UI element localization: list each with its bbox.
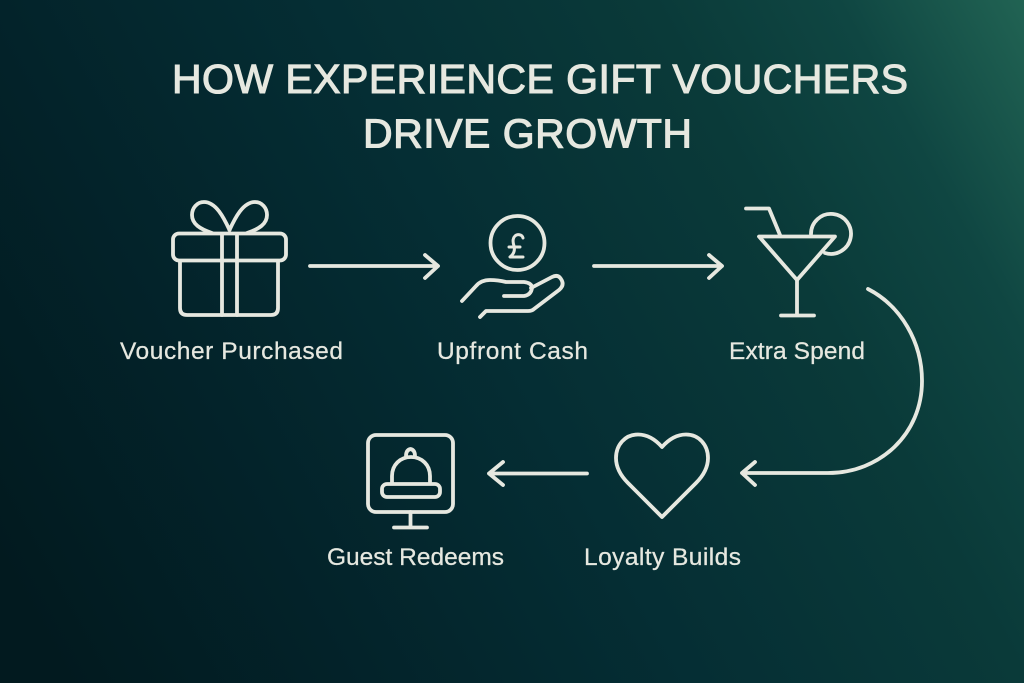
icon: gift box xyxy=(173,202,286,315)
label: Guest Redeems: Guest Redeems xyxy=(327,544,504,571)
icon: service bell on screen xyxy=(368,435,453,528)
arrow: cash to spend xyxy=(594,255,722,278)
title: DRIVE GROWTH xyxy=(363,110,692,156)
label: Upfront Cash: Upfront Cash xyxy=(437,338,588,365)
arrow: loyalty to guest xyxy=(489,462,587,485)
pound sign xyxy=(509,235,523,257)
arrow: purchased to cash xyxy=(310,255,438,278)
title: HOW EXPERIENCE GIFT VOUCHERS xyxy=(172,56,908,102)
icon: hand with pound coin xyxy=(462,216,563,317)
icon: heart xyxy=(616,434,708,517)
title xyxy=(172,56,908,156)
label: Loyalty Builds: Loyalty Builds xyxy=(584,544,741,571)
icon: cocktail glass xyxy=(746,208,851,316)
label: Extra Spend: Extra Spend xyxy=(729,338,865,365)
arrow: curved spend to loyalty xyxy=(742,289,922,485)
label: Voucher Purchased: Voucher Purchased xyxy=(120,338,343,365)
